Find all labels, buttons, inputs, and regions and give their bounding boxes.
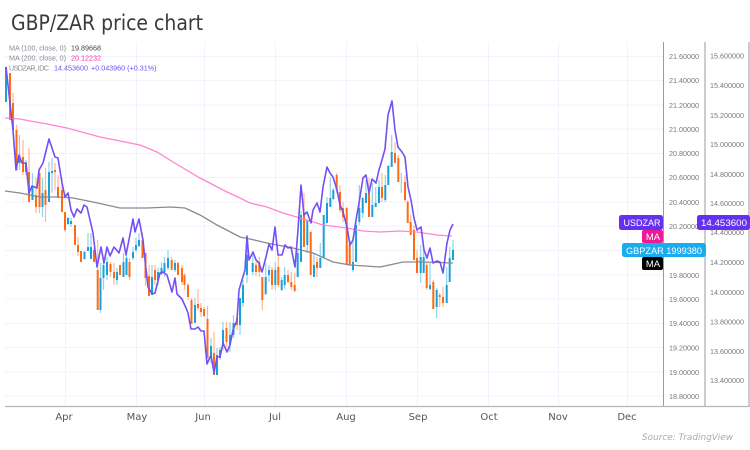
- USDZAR price axis: [710, 52, 744, 385]
- time axis months: Apr: [55, 412, 74, 423]
- USDZAR price axis: 14.600000: [710, 199, 744, 208]
- legend row: USDZAR: USDZAR, IDC: [9, 64, 49, 72]
- moving average 100 line: [5, 191, 453, 267]
- GBPZAR price axis: 21.20000: [669, 101, 699, 110]
- tag: GBPZAR value: GBPZAR 1999380: [626, 246, 702, 257]
- tag: USDZAR: USDZAR: [624, 218, 661, 229]
- USDZAR price axis: 13.800000: [710, 318, 744, 326]
- time axis months: Jul: [268, 412, 281, 423]
- legend: indicators: [9, 44, 157, 72]
- GBPZAR price axis: 19.00000: [669, 368, 699, 377]
- USDZAR price axis: 14.400000: [710, 228, 744, 237]
- GBPZAR price axis: 21.60000: [669, 52, 699, 61]
- time axis months: Sep: [409, 412, 427, 423]
- legend row: MA 100: 19.89668: [71, 44, 101, 52]
- legend row: MA 200: MA (200, close, 0): [9, 54, 66, 62]
- time axis months: Aug: [336, 412, 356, 423]
- candlestick series: GBPZAR: [6, 67, 453, 375]
- USDZAR price axis: 13.600000: [710, 347, 744, 356]
- GBPZAR price axis: 19.80000: [669, 271, 699, 280]
- time axis months: [55, 412, 637, 423]
- tag: MA pink: MA: [646, 232, 661, 243]
- legend row: USDZAR: +0.043960 (+0.31%): [91, 64, 157, 72]
- time axis months: Jun: [194, 412, 211, 423]
- USDZAR price axis: 13.400000: [710, 376, 744, 385]
- time axis months: Dec: [617, 412, 637, 423]
- GBPZAR price axis: 19.60000: [669, 295, 699, 304]
- title: GBP/ZAR price chart: [11, 11, 203, 35]
- GBPZAR price axis: 20.80000: [669, 149, 699, 158]
- GBPZAR price axis: 20.60000: [669, 173, 699, 182]
- GBPZAR price axis: 18.80000: [669, 392, 699, 401]
- GBPZAR price axis: 19.20000: [669, 344, 699, 352]
- moving average 200 line: [5, 118, 452, 236]
- USDZAR price axis: 15.600000: [710, 52, 744, 60]
- legend row: MA 100: MA (100, close, 0): [9, 44, 66, 52]
- time axis months: Nov: [548, 412, 568, 423]
- USDZAR price axis: 14.800000: [710, 170, 744, 179]
- tag: USDZAR value: 14.453600: [701, 218, 747, 229]
- USDZAR price axis: 15.000000: [710, 140, 744, 149]
- source note: Source: TradingView: [642, 433, 734, 443]
- USDZAR price axis: 15.400000: [710, 81, 744, 90]
- time axis months: May: [127, 412, 147, 423]
- USDZAR price line: [6, 67, 453, 373]
- USDZAR price axis: 14.000000: [710, 288, 744, 297]
- GBPZAR price axis: 19.40000: [669, 319, 699, 328]
- legend row: MA 200: 20.12232: [71, 54, 101, 62]
- GBPZAR price axis: 20.20000: [669, 222, 699, 231]
- GBPZAR price axis: 21.40000: [669, 76, 699, 85]
- time axis months: Oct: [480, 412, 498, 423]
- chart gridlines: [5, 42, 663, 406]
- GBPZAR price axis: 21.00000: [669, 125, 699, 134]
- GBPZAR price axis: [669, 52, 699, 401]
- legend row: USDZAR: 14.453600: [54, 64, 88, 72]
- USDZAR price axis: 14.200000: [710, 258, 744, 267]
- USDZAR price axis: 15.200000: [710, 111, 744, 120]
- price tags: [619, 215, 750, 270]
- tag: MA black: MA: [646, 259, 661, 270]
- GBPZAR price axis: 20.40000: [669, 198, 699, 207]
